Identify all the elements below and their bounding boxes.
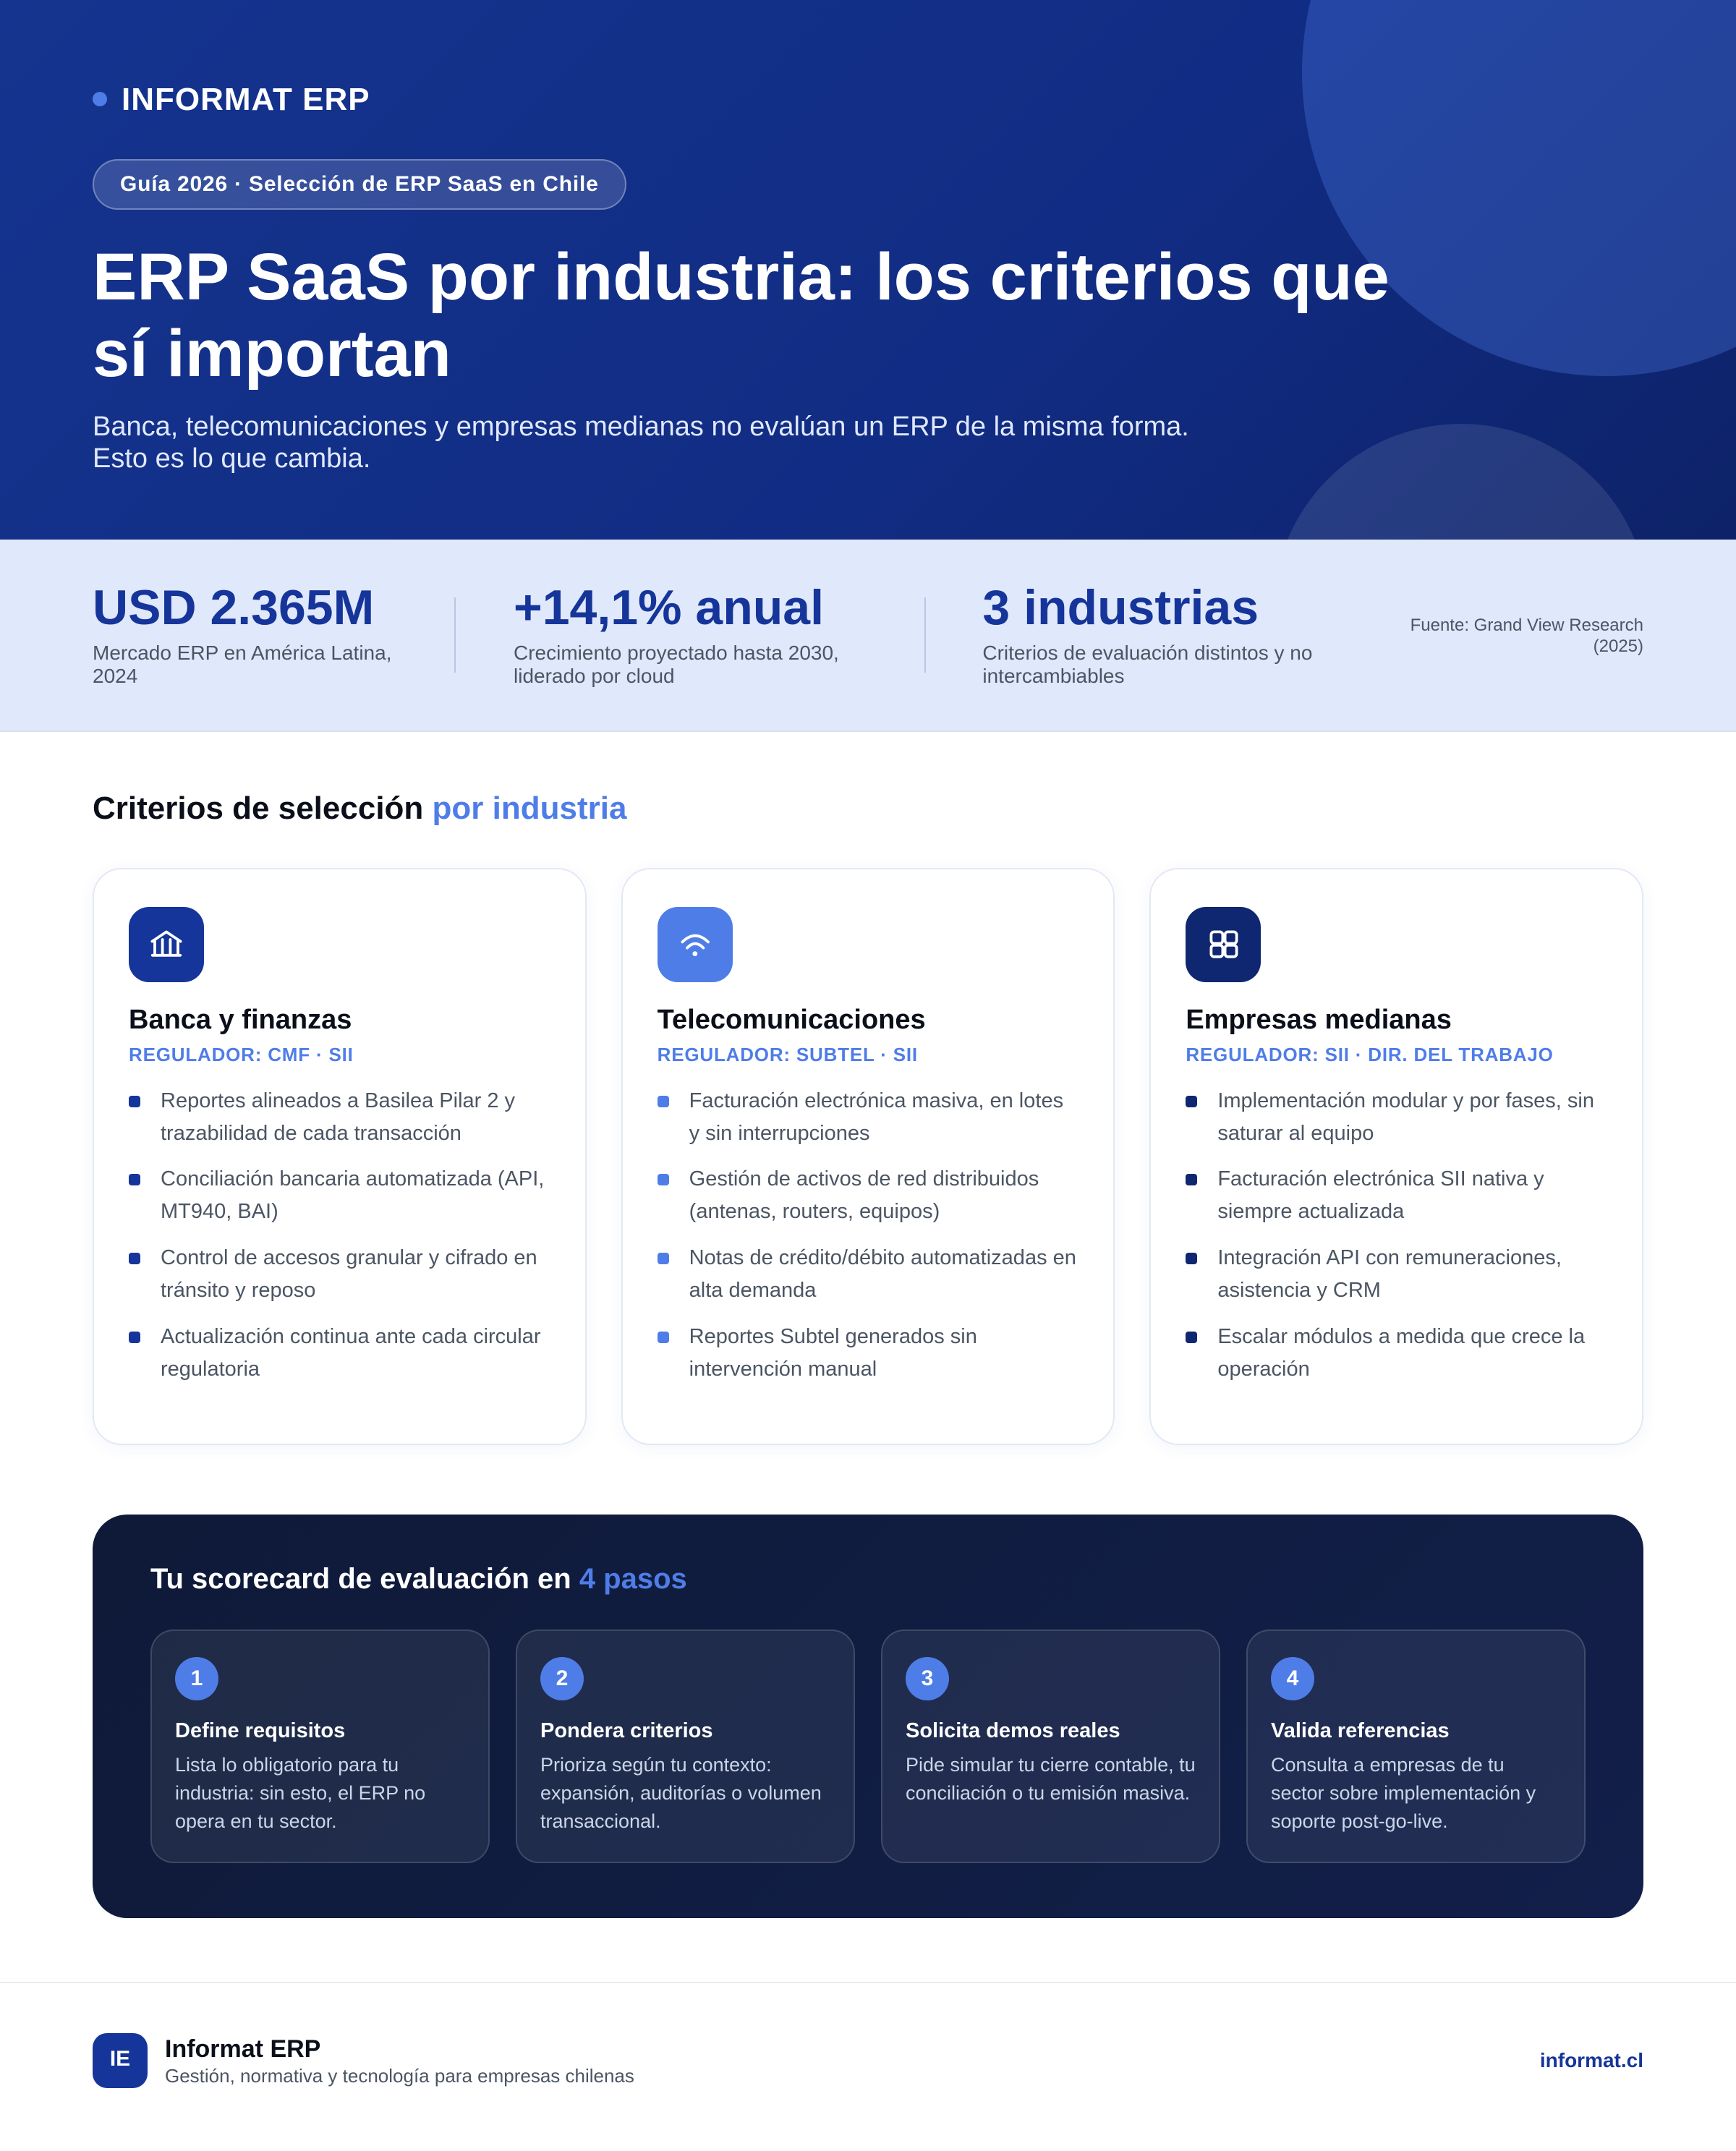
number badge <box>540 1657 584 1700</box>
item <box>129 1167 544 1223</box>
step text <box>175 1754 425 1832</box>
step title: Pondera criterios <box>540 1719 713 1742</box>
step text: conciliación o tu emisión masiva. <box>906 1782 1190 1804</box>
step text: transaccional. <box>540 1810 661 1832</box>
stat value: 3 industrias <box>982 580 1259 635</box>
footer logo <box>93 2033 148 2088</box>
step 2 <box>516 1630 855 1863</box>
step title: Valida referencias <box>1271 1719 1450 1742</box>
brand name: INFORMAT ERP <box>122 82 370 117</box>
step text: industria: sin esto, el ERP no <box>175 1782 425 1804</box>
subtitle: Banca, telecomunicaciones y empresas medianas no evalúan un ERP de la misma forma. <box>93 412 1189 442</box>
main title: sí importan <box>93 317 451 391</box>
stat label <box>93 642 391 687</box>
item: intervención manual <box>689 1358 877 1381</box>
stat label: liderado por cloud <box>514 665 675 687</box>
footer tagline: Gestión, normativa y tecnología para empresas chilenas <box>165 2065 634 2087</box>
bullet list <box>129 1089 544 1381</box>
step text <box>1271 1751 1536 1836</box>
decorative large circle <box>1302 0 1736 376</box>
brand dot <box>93 92 107 106</box>
item <box>658 1246 1076 1302</box>
stat label: 2024 <box>93 665 137 687</box>
stat label <box>982 642 1312 687</box>
number badge: 4 <box>1287 1666 1298 1690</box>
item: regulatoria <box>161 1358 260 1381</box>
step text: Consulta a empresas de tu <box>1271 1754 1505 1776</box>
item: Actualización continua ante cada circular <box>161 1325 541 1348</box>
stats band <box>0 540 1736 732</box>
icon: wifi <box>658 907 733 982</box>
card title: Banca y finanzas <box>129 1005 352 1035</box>
regulator: REGULADOR: SII · DIR. DEL TRABAJO <box>1186 1044 1554 1065</box>
panel: telecomunicaciones <box>621 868 1115 1445</box>
item: Gestión de activos de red distribuidos <box>689 1167 1039 1190</box>
item: (antenas, routers, equipos) <box>689 1200 940 1223</box>
item: Facturación electrónica masiva, en lotes <box>689 1089 1063 1112</box>
item <box>1186 1246 1562 1302</box>
main title: ERP SaaS por industria: los criterios que <box>93 240 1390 314</box>
step title: Define requisitos <box>175 1719 345 1742</box>
number badge <box>1271 1657 1314 1700</box>
item: Escalar módulos a medida que crece la <box>1217 1325 1585 1348</box>
number badge: 2 <box>556 1666 568 1690</box>
step text <box>906 1754 1196 1804</box>
source note: Fuente: Grand View Research <box>1410 616 1643 635</box>
stat: market <box>93 580 391 687</box>
step text: Pide simular tu cierre contable, tu <box>906 1754 1196 1776</box>
item: asistencia y CRM <box>1217 1279 1381 1302</box>
item: MT940, BAI) <box>161 1200 278 1223</box>
item: siempre actualizada <box>1217 1200 1404 1223</box>
item: Implementación modular y por fases, sin <box>1217 1089 1594 1112</box>
item <box>658 1325 977 1381</box>
regulator: REGULADOR: SUBTEL · SII <box>658 1044 918 1065</box>
number badge: 1 <box>191 1666 203 1690</box>
section heading: Criterios de selección por industria <box>93 791 626 826</box>
step 3 <box>881 1630 1220 1863</box>
stat label: Mercado ERP en América Latina, <box>93 642 391 664</box>
source note <box>1410 616 1643 656</box>
stat: growth <box>514 580 839 687</box>
item <box>1186 1325 1586 1381</box>
item: trazabilidad de cada transacción <box>161 1122 461 1145</box>
stat label: intercambiables <box>982 665 1124 687</box>
stat label <box>514 642 839 687</box>
item <box>129 1089 515 1145</box>
source note: (2025) <box>1594 636 1643 656</box>
panel: banca y finanzas <box>93 868 587 1445</box>
number badge <box>906 1657 949 1700</box>
item: Reportes Subtel generados sin <box>689 1325 977 1348</box>
panel: empresas medianas <box>1149 868 1643 1445</box>
step text <box>540 1754 822 1832</box>
item: Notas de crédito/débito automatizadas en <box>689 1246 1076 1269</box>
footer link: informat.cl <box>1540 2049 1643 2071</box>
item <box>658 1089 1063 1145</box>
subtitle: Esto es lo que cambia. <box>93 443 370 474</box>
item: Conciliación bancaria automatizada (API, <box>161 1167 544 1190</box>
header panel <box>0 0 1736 540</box>
stat label: Crecimiento proyectado hasta 2030, <box>514 642 839 664</box>
footer brand <box>93 2033 671 2088</box>
card title: Telecomunicaciones <box>658 1005 926 1035</box>
step 4 <box>1246 1630 1586 1863</box>
item: alta demanda <box>689 1279 816 1302</box>
scorecard heading: Tu scorecard de evaluación en 4 pasos <box>150 1563 687 1595</box>
item <box>658 1167 1039 1223</box>
item: Integración API con remuneraciones, <box>1217 1246 1562 1269</box>
item: Control de accesos granular y cifrado en <box>161 1246 537 1269</box>
footer logo: IE <box>110 2047 130 2071</box>
step text: expansión, auditorías o volumen <box>540 1782 822 1804</box>
main title <box>93 240 1390 391</box>
footer name: Informat ERP <box>165 2035 320 2063</box>
bullet list <box>658 1089 1076 1381</box>
item: tránsito y reposo <box>161 1279 315 1302</box>
item <box>1186 1089 1594 1145</box>
card title: Empresas medianas <box>1186 1005 1452 1035</box>
bullet list <box>1186 1089 1594 1381</box>
stat value: USD 2.365M <box>93 580 374 635</box>
item: y sin interrupciones <box>689 1122 869 1145</box>
stat label: Criterios de evaluación distintos y no <box>982 642 1312 664</box>
item <box>1186 1167 1544 1223</box>
regulator: REGULADOR: CMF · SII <box>129 1044 354 1065</box>
item <box>129 1325 541 1381</box>
step text: Prioriza según tu contexto: <box>540 1754 772 1776</box>
icon: bank <box>129 907 204 982</box>
item: Reportes alineados a Basilea Pilar 2 y <box>161 1089 515 1112</box>
subtitle <box>93 412 1189 474</box>
item: operación <box>1217 1358 1310 1381</box>
step title: Solicita demos reales <box>906 1719 1120 1742</box>
stat value: +14,1% anual <box>514 580 824 635</box>
item: Facturación electrónica SII nativa y <box>1217 1167 1544 1190</box>
guide badge: Guía 2026 · Selección de ERP SaaS en Chile <box>120 172 599 196</box>
step text: sector sobre implementación y <box>1271 1782 1536 1804</box>
step text: Lista lo obligatorio para tu <box>175 1754 399 1776</box>
guide badge <box>93 159 626 210</box>
brand <box>93 82 370 117</box>
step text: soporte post-go-live. <box>1271 1810 1448 1832</box>
item: saturar al equipo <box>1217 1122 1374 1145</box>
number badge <box>175 1657 218 1700</box>
number badge: 3 <box>922 1666 933 1690</box>
step 1 <box>150 1630 490 1863</box>
item <box>129 1246 537 1302</box>
panel: scorecard <box>93 1515 1643 1918</box>
decorative small circle <box>1273 424 1649 800</box>
stat: industries <box>982 580 1312 687</box>
icon: grid <box>1186 907 1261 982</box>
step text: opera en tu sector. <box>175 1810 337 1832</box>
